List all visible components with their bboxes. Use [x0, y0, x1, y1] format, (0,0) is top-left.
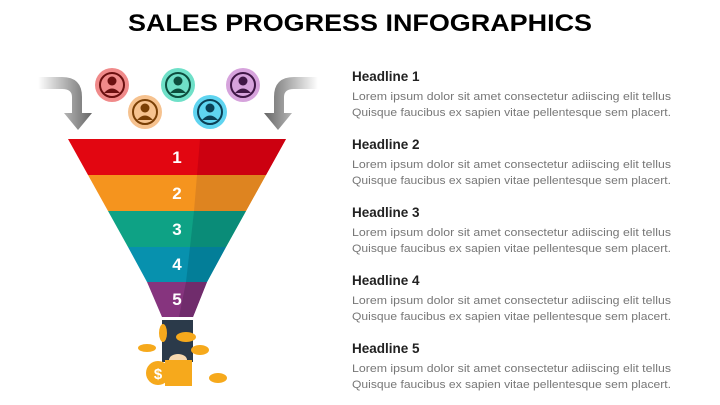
arrow: left	[38, 77, 92, 130]
headline 4: Quisque faucibus ex sapien vitae pellentesque sem placert.	[352, 311, 671, 323]
icon: purple person	[226, 68, 260, 102]
headline 3: Lorem ipsum dolor sit amet consectetur adiiscing elit tellus	[352, 227, 672, 239]
funnel stem with coins	[138, 320, 227, 386]
funnel stem with coins: $	[154, 366, 163, 383]
funnel band 5: 5	[172, 290, 182, 309]
funnel band 1: 1	[172, 148, 182, 167]
title: SALES PROGRESS INFOGRAPHICS	[128, 10, 592, 37]
text blocks	[352, 69, 672, 391]
funnel band 4	[128, 247, 226, 282]
icon: cyan person	[193, 95, 227, 129]
headline 3: Quisque faucibus ex sapien vitae pellentesque sem placert.	[352, 243, 671, 255]
headline 2: Lorem ipsum dolor sit amet consectetur adiiscing elit tellus	[352, 159, 672, 171]
headline 4	[352, 273, 672, 323]
headline 1: Lorem ipsum dolor sit amet consectetur adiiscing elit tellus	[352, 91, 672, 103]
funnel band 3	[108, 211, 246, 247]
icon: orange person	[128, 95, 162, 129]
funnel	[68, 139, 286, 317]
headline 5	[352, 341, 672, 391]
icons: people	[95, 68, 260, 129]
headline 5: Headline 5	[352, 341, 420, 356]
headline 2: Headline 2	[352, 137, 420, 152]
headline 1: Headline 1	[352, 69, 420, 84]
funnel band 3: 3	[172, 220, 182, 239]
headline 3: Headline 3	[352, 205, 420, 220]
headline 4: Lorem ipsum dolor sit amet consectetur adiiscing elit tellus	[352, 295, 672, 307]
funnel band 2: 2	[172, 184, 182, 203]
funnel band 2	[88, 175, 266, 211]
headline 5: Lorem ipsum dolor sit amet consectetur adiiscing elit tellus	[352, 363, 672, 375]
headline 4: Headline 4	[352, 273, 420, 288]
funnel band 4: 4	[172, 255, 182, 274]
icon: red person	[95, 68, 129, 102]
funnel band 5	[147, 282, 207, 317]
headline 2: Quisque faucibus ex sapien vitae pellentesque sem placert.	[352, 175, 671, 187]
headline 2	[352, 137, 672, 187]
funnel band 1	[68, 139, 286, 175]
arrow: right	[264, 77, 318, 130]
headline 5: Quisque faucibus ex sapien vitae pellentesque sem placert.	[352, 379, 671, 391]
icon: teal person	[161, 68, 195, 102]
headline 3	[352, 205, 672, 255]
headline 1: Quisque faucibus ex sapien vitae pellentesque sem placert.	[352, 107, 671, 119]
headline 1	[352, 69, 672, 119]
